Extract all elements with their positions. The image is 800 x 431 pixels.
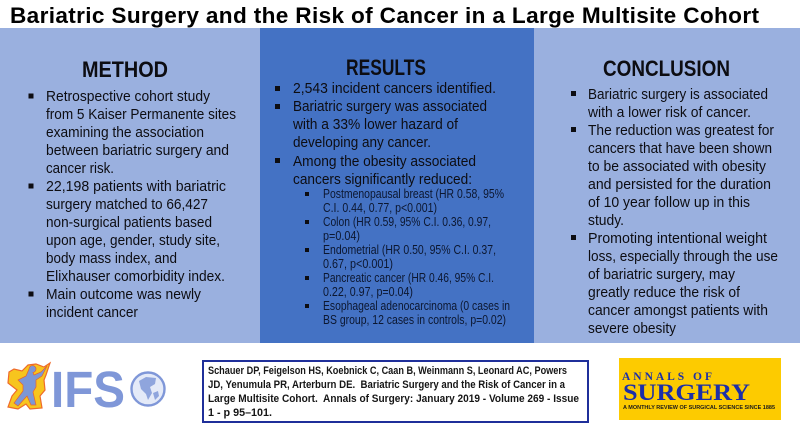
panel: conclusion bbox=[534, 28, 800, 343]
bullet list: conclusion: to be associated with obesity bbox=[588, 159, 767, 175]
bullet list: results: cancers significantly reduced: bbox=[293, 172, 472, 188]
bullet list: conclusion: Promoting intentional weight bbox=[588, 231, 767, 247]
bullet list: method: incident cancer bbox=[46, 305, 138, 321]
bullet list: conclusion: greatly reduce the risk of bbox=[588, 285, 741, 301]
sub-list: obesity-associated cancers: C.I. 0.44, 0.77, p<0.001) bbox=[323, 201, 437, 215]
bullet list: conclusion bbox=[571, 87, 778, 337]
bullet list: method: examining the association bbox=[46, 125, 204, 141]
logo: Annals of Surgery: ANNALS OF bbox=[622, 371, 712, 383]
bullet list: conclusion: severe obesity bbox=[588, 321, 677, 337]
bullet list: method bbox=[28, 89, 236, 321]
bullet list: method: Retrospective cohort study bbox=[46, 89, 211, 105]
sub-list: obesity-associated cancers: Colon (HR 0.59, 95% C.I. 0.36, 0.97, bbox=[323, 215, 491, 229]
citation box bbox=[203, 361, 588, 422]
title: Bariatric Surgery and the Risk of Cancer in a Large Multisite Cohort bbox=[10, 3, 759, 28]
bullet list: method: between bariatric surgery and bbox=[46, 143, 229, 159]
logo: Annals of Surgery bbox=[619, 358, 781, 420]
sub-list: obesity-associated cancers bbox=[305, 187, 510, 327]
bullet list: conclusion: with a lower risk of cancer. bbox=[587, 105, 751, 121]
bullet list: conclusion: of 10 year follow up in this bbox=[588, 195, 750, 211]
bullet list: results bbox=[275, 81, 510, 327]
citation box: 1 - p 95–101. bbox=[208, 407, 272, 419]
icon: globe bbox=[132, 372, 164, 406]
panel: results bbox=[260, 28, 534, 343]
bullet list: conclusion: loss, especially through the use bbox=[588, 249, 778, 265]
citation box: Schauer DP, Feigelson HS, Koebnick C, Caan B, Weinmann S, Leonard AC, Powers bbox=[208, 365, 567, 377]
citation box: Large Multisite Cohort. Annals of Surgery: January 2019 - Volume 269 - Issue bbox=[208, 393, 579, 405]
logo: IFSO bbox=[8, 361, 164, 418]
sub-list: obesity-associated cancers: p=0.04) bbox=[323, 229, 360, 243]
sub-list: obesity-associated cancers: 0.22, 0.97, p=0.04) bbox=[323, 285, 413, 299]
bullet list: method: cancer risk. bbox=[46, 161, 114, 177]
bullet list: method: 22,198 patients with bariatric bbox=[46, 179, 226, 195]
bullet list: method: body mass index, and bbox=[46, 251, 177, 267]
bullet list: results: Among the obesity associated bbox=[293, 154, 476, 170]
icon: flame figure bbox=[8, 363, 50, 409]
sub-list: obesity-associated cancers: Esophageal adenocarcinoma (0 cases in bbox=[323, 299, 510, 313]
bullet list: method: Elixhauser comorbidity index. bbox=[46, 269, 225, 285]
bullet list: results: 2,543 incident cancers identified. bbox=[293, 81, 496, 97]
bullet list: method: non-surgical patients based bbox=[46, 215, 212, 231]
bullet list: results: developing any cancer. bbox=[293, 135, 431, 151]
bullet list: conclusion: The reduction was greatest for bbox=[588, 123, 774, 139]
heading: conclusion: CONCLUSION bbox=[603, 56, 730, 81]
citation box: JD, Yenumula PR, Arterburn DE. Bariatric Surgery and the Risk of Cancer in a bbox=[208, 379, 566, 391]
bullet list: method: Main outcome was newly bbox=[46, 287, 202, 303]
panel: method bbox=[0, 28, 260, 343]
sub-list: obesity-associated cancers: Endometrial (HR 0.50, 95% C.I. 0.37, bbox=[323, 243, 496, 257]
sub-list: obesity-associated cancers: BS group, 12 cases in controls, p=0.02) bbox=[323, 313, 506, 327]
heading: method: METHOD bbox=[82, 57, 168, 82]
bullet list: method: from 5 Kaiser Permanente sites bbox=[46, 107, 236, 123]
bullet list: method: surgery matched to 66,427 bbox=[46, 197, 208, 213]
bullet list: conclusion: and persisted for the duration bbox=[588, 177, 771, 193]
logo wordmark: IFS bbox=[51, 361, 125, 418]
bullet list: conclusion: cancer amongst patients with bbox=[588, 303, 768, 319]
heading: results: RESULTS bbox=[346, 55, 426, 80]
bullet list: conclusion: study. bbox=[588, 213, 624, 229]
sub-list: obesity-associated cancers: Postmenopausal breast (HR 0.58, 95% bbox=[323, 187, 504, 201]
sub-list: obesity-associated cancers: Pancreatic cancer (HR 0.46, 95% C.I. bbox=[323, 271, 494, 285]
bullet list: results: Bariatric surgery was associated bbox=[293, 99, 487, 115]
sub-list: obesity-associated cancers: 0.67, p<0.001) bbox=[323, 257, 393, 271]
logo: Annals of Surgery: SURGERY bbox=[623, 380, 750, 405]
bullet list: results: with a 33% lower hazard of bbox=[292, 117, 459, 133]
bullet list: conclusion: Bariatric surgery is associated bbox=[588, 87, 768, 103]
bullet list: conclusion: cancers that have been shown bbox=[588, 141, 772, 157]
bullet list: conclusion: of bariatric surgery, may bbox=[588, 267, 736, 283]
bullet list: method: upon age, gender, study site, bbox=[46, 233, 220, 249]
logo: Annals of Surgery: A MONTHLY REVIEW OF SURGICAL SCIENCE SINCE 1885 bbox=[623, 405, 775, 411]
